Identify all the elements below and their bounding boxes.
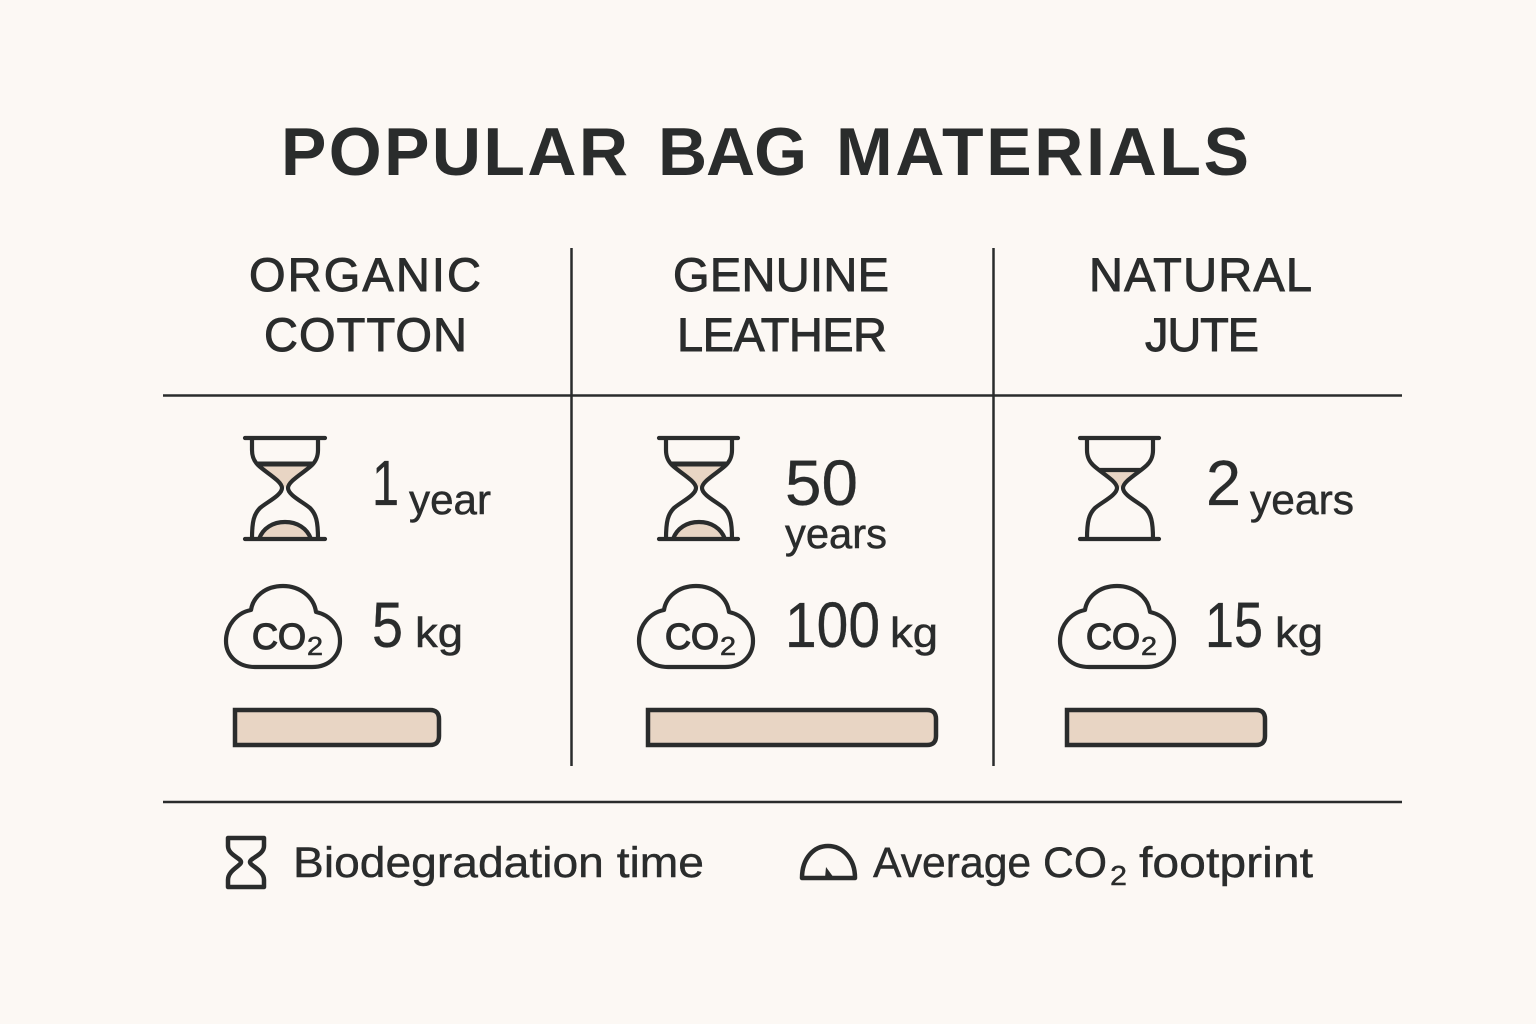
heading: genuine leather: LEATHER	[677, 308, 887, 361]
CO2 value: 15 kg	[1205, 589, 1323, 661]
CO2 value: 5 kg: 5	[372, 589, 403, 661]
icon: CO2 cloud: 2	[720, 631, 736, 661]
icon: CO2 cloud: 2	[1141, 631, 1157, 661]
icon: CO2 cloud: CO	[1086, 616, 1140, 657]
CO2 value: 100 kg: kg	[890, 609, 938, 656]
legend label: average CO2 footprint: Average CO	[873, 839, 1107, 887]
title: POPULAR	[281, 114, 628, 190]
heading: natural jute: JUTE	[1145, 308, 1259, 361]
bar: leather footprint	[648, 710, 936, 745]
panel: organic cotton	[226, 248, 491, 745]
title: BAG	[658, 114, 807, 190]
panel: genuine leather	[639, 248, 938, 745]
bar: cotton footprint	[235, 710, 439, 745]
biodegradation value: 50 years: years	[785, 510, 887, 557]
biodegradation value: 2 years: 2	[1206, 447, 1241, 519]
biodegradation value: 1 year	[372, 447, 491, 523]
icon: CO2 cloud: 2	[307, 631, 323, 661]
title	[281, 114, 1249, 190]
heading: natural jute: NATURAL	[1089, 248, 1312, 301]
panel: natural jute	[1060, 248, 1354, 745]
bar: jute footprint	[1067, 710, 1265, 745]
biodegradation value: 2 years: years	[1250, 476, 1354, 523]
heading: organic cotton: ORGANIC	[249, 248, 481, 301]
biodegradation value: 50 years	[785, 447, 887, 557]
legend icon: gauge	[802, 846, 855, 878]
icon: CO2 cloud	[1060, 586, 1174, 667]
CO2 value: 15 kg: 15	[1205, 589, 1263, 661]
legend label: biodegradation time: Biodegradation time	[293, 839, 704, 887]
legend label: average CO2 footprint: 2	[1110, 860, 1127, 891]
legend icon: hourglass	[228, 838, 264, 887]
heading: organic cotton: COTTON	[264, 308, 467, 361]
icon: CO2 cloud	[639, 586, 753, 667]
CO2 value: 100 kg	[785, 589, 938, 661]
icon: hourglass with top sand only	[1080, 438, 1159, 539]
CO2 value: 5 kg: kg	[415, 609, 463, 656]
icon: hourglass with top and bottom sand	[659, 438, 738, 539]
heading: natural jute	[1089, 248, 1312, 361]
biodegradation value: 50 years: 50	[785, 447, 858, 519]
CO2 value: 5 kg	[372, 589, 463, 661]
heading: genuine leather	[673, 248, 889, 361]
icon: hourglass with top and bottom sand	[245, 438, 325, 539]
icon: CO2 cloud: CO	[252, 616, 306, 657]
CO2 value: 15 kg: kg	[1275, 609, 1323, 656]
heading: organic cotton	[249, 248, 481, 361]
legend label: average CO2 footprint: footprint	[1139, 839, 1313, 887]
biodegradation value: 2 years	[1206, 447, 1354, 523]
title: MATERIALS	[836, 114, 1249, 190]
icon: CO2 cloud	[226, 586, 340, 667]
CO2 value: 100 kg: 100	[785, 589, 880, 661]
biodegradation value: 1 year: year	[409, 476, 491, 523]
heading: genuine leather: GENUINE	[673, 248, 889, 301]
biodegradation value: 1 year: 1	[372, 447, 399, 519]
legend	[228, 838, 1313, 891]
legend label: average CO2 footprint	[873, 839, 1313, 891]
icon: CO2 cloud: CO	[665, 616, 719, 657]
